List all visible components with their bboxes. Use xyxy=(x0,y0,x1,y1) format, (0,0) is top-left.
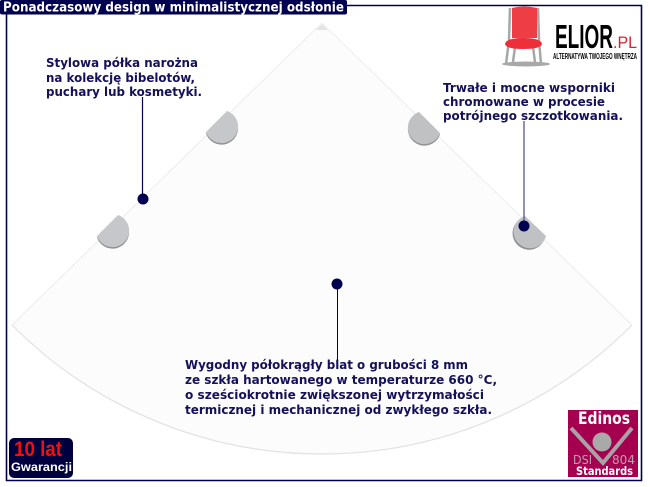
callout: stylish shelf: puchary lub kosmetyki. xyxy=(46,84,202,99)
icon: chrome bracket lower left xyxy=(97,215,129,249)
pointer: brackets xyxy=(518,121,530,232)
badge: 10 years warranty xyxy=(9,438,73,478)
callout: glass top: o sześciokrotnie zwiększonej wytrzymałości xyxy=(185,387,484,402)
callout: glass top xyxy=(185,357,497,417)
badge: Edinos standards: Standards xyxy=(576,464,633,478)
callout: stylish shelf: Stylowa półka narożna xyxy=(46,55,198,70)
logo: Elior: .PL xyxy=(613,33,637,52)
title bar: Ponadczasowy design w minimalistycznej odsłonie xyxy=(3,0,344,16)
icon: red chair xyxy=(502,6,550,66)
callout: brackets xyxy=(443,80,623,123)
icon: chrome bracket lower right xyxy=(513,216,546,250)
callout: brackets: Trwałe i mocne wsporniki xyxy=(443,80,615,95)
badge: Edinos standards: DSI xyxy=(573,453,592,467)
badge: Edinos standards xyxy=(568,409,638,478)
badge: 10 years warranty: 10 lat xyxy=(14,438,62,461)
callout: stylish shelf: na kolekcję bibelotów, xyxy=(46,70,195,85)
pointer: stylish shelf xyxy=(138,97,148,204)
callout: glass top: ze szkła hartowanego w temperaturze 660 °C, xyxy=(185,372,497,387)
callout: stylish shelf xyxy=(46,55,202,99)
callout: brackets: chromowane w procesie xyxy=(443,94,605,109)
badge: 10 years warranty: Gwarancji xyxy=(11,460,72,474)
callout: glass top: termicznej i mechanicznej od zwykłego szkła. xyxy=(185,402,492,417)
badge: Edinos standards: Edinos xyxy=(578,409,630,429)
pointer: glass top xyxy=(332,278,342,362)
badge: Edinos standards: 804 xyxy=(612,453,635,467)
callout: brackets: potrójnego szczotkowania. xyxy=(443,108,623,123)
logo: Elior xyxy=(502,6,637,66)
icon: chrome bracket top left xyxy=(206,111,238,145)
callout: glass top: Wygodny półokrągły blat o grubości 8 mm xyxy=(185,357,468,372)
icon: chrome bracket top right xyxy=(408,112,440,146)
